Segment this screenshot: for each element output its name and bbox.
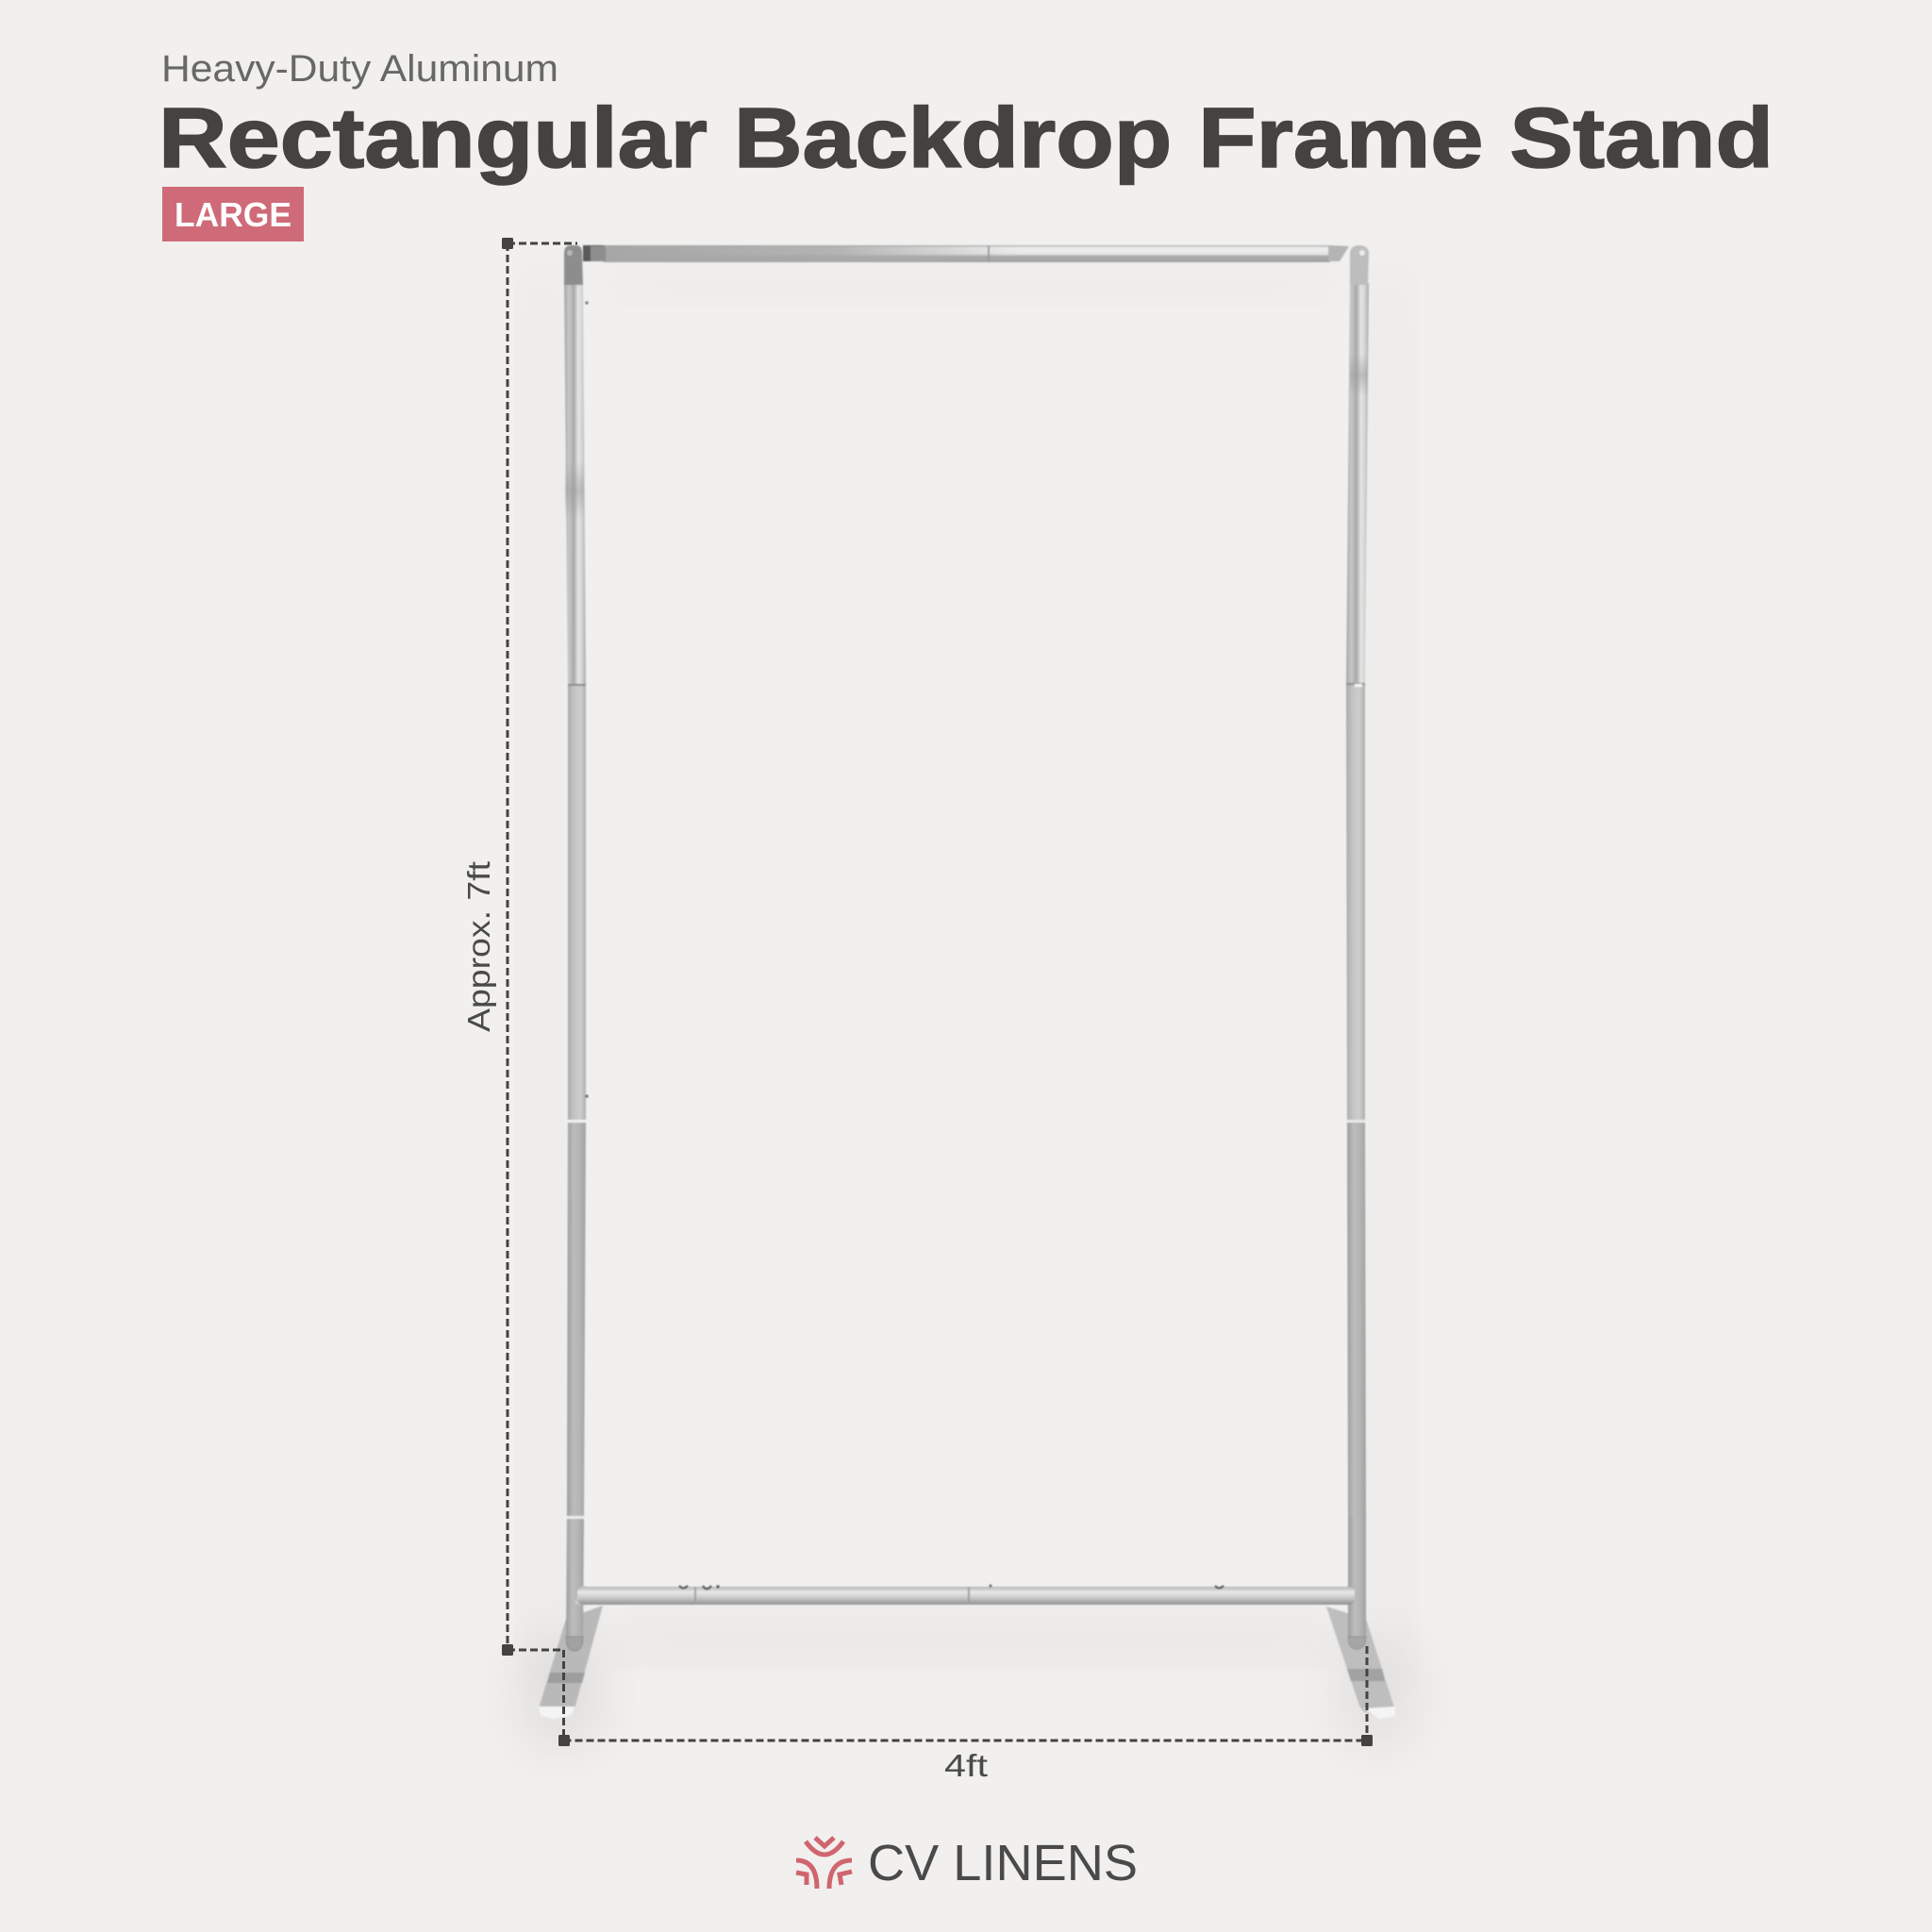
width label: 4ft bbox=[944, 1748, 988, 1783]
backdrop frame stand bbox=[539, 245, 1395, 1719]
top right corner joint bbox=[1350, 245, 1369, 285]
left pole bbox=[564, 283, 589, 1651]
logo icon bbox=[796, 1838, 852, 1889]
bottom bar bbox=[575, 1585, 1355, 1606]
height label: Approx. 7ft bbox=[461, 861, 496, 1032]
left foot bbox=[539, 1606, 603, 1719]
top bar bbox=[583, 245, 1349, 262]
height dimension line bbox=[502, 238, 577, 1656]
frame shadow bbox=[524, 264, 1415, 1745]
subtitle: Heavy-Duty Aluminum bbox=[161, 48, 558, 90]
right pole bbox=[1346, 283, 1369, 1649]
title: Rectangular Backdrop Frame Stand bbox=[158, 92, 1774, 186]
right foot bbox=[1326, 1607, 1395, 1719]
size badge bbox=[162, 187, 304, 242]
logo wordmark: CV LINENS bbox=[868, 1835, 1138, 1891]
size badge: LARGE bbox=[175, 195, 291, 234]
width dimension line bbox=[558, 1646, 1373, 1746]
top left corner joint bbox=[564, 245, 583, 285]
